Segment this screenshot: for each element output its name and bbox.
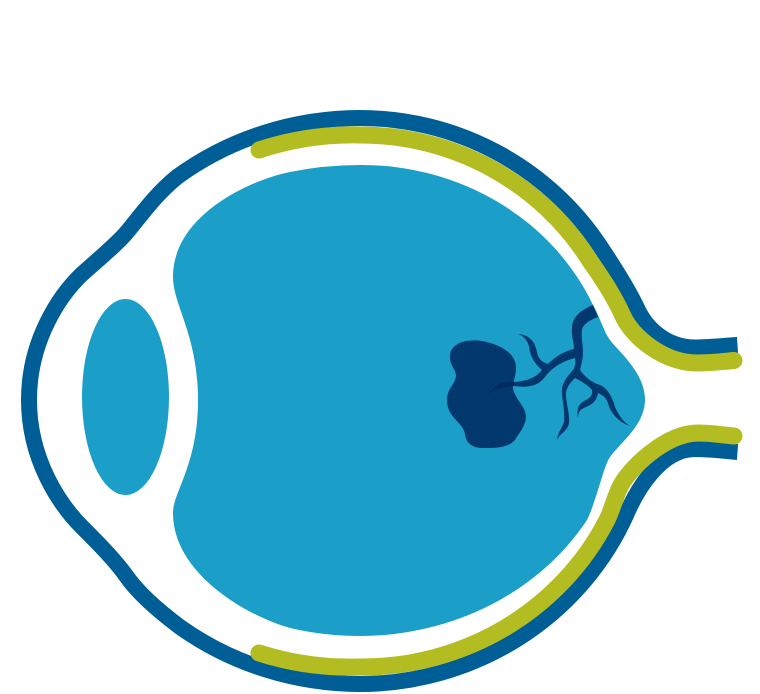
retina lower band [259,433,734,667]
outer sclera outline [29,118,738,684]
vitreous body [173,165,645,636]
abnormal blood vessels [514,305,630,440]
dark lesion [447,340,526,448]
retina upper band [259,135,734,363]
vessel tip over lesion [487,382,514,394]
lens [82,299,169,495]
